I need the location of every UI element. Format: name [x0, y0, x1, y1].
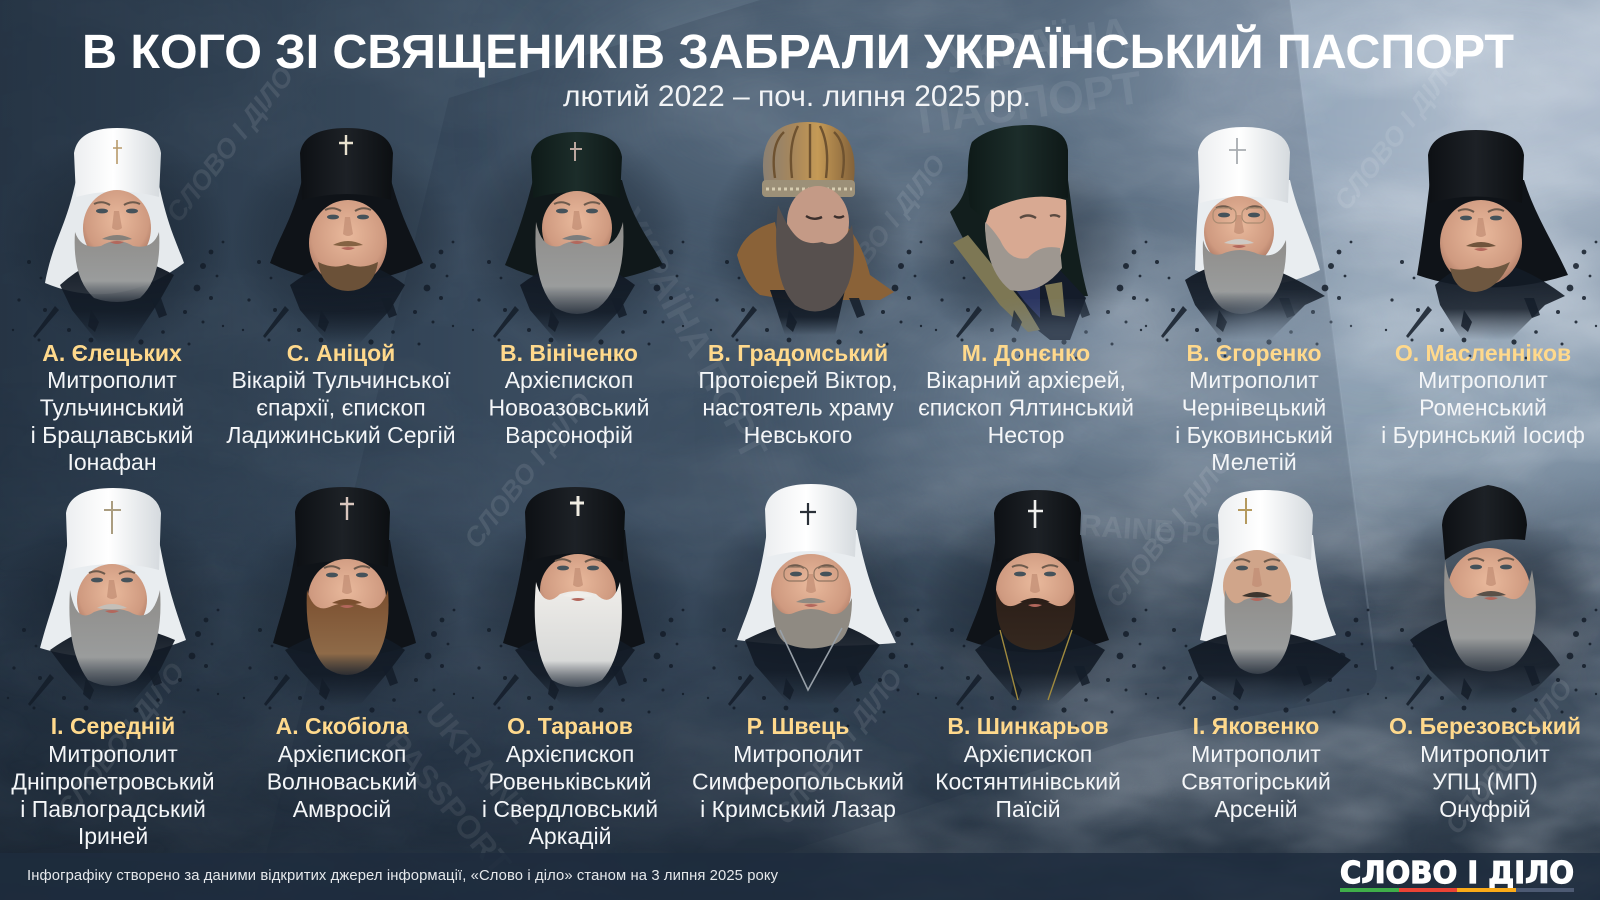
passport silhouette: [255, 0, 1377, 900]
role: Митрополит: [1418, 367, 1548, 393]
role: Митрополит: [733, 741, 863, 767]
portrait: [911, 125, 1147, 359]
watermarks: СЛОВО І ДІЛО: [51, 657, 191, 824]
role: Варсонофій: [505, 422, 633, 448]
role: єпархії, єпископ: [256, 394, 426, 420]
logo: СЛОВО І ДІЛО: [1340, 856, 1574, 891]
role: Архієпископ: [505, 367, 633, 393]
name: М. Донєнко: [962, 340, 1090, 366]
watermarks: СЛОВО І ДІЛО: [1328, 49, 1468, 216]
role: Митрополит: [1420, 741, 1550, 767]
card: Швець: [692, 484, 924, 822]
role: Вікарний архієрей,: [926, 367, 1126, 393]
role: Мелетій: [1211, 449, 1297, 475]
watermarks: СЛОВО І ДІЛО: [458, 387, 598, 554]
role: Новоазовський: [489, 394, 649, 420]
portrait: [1140, 127, 1352, 359]
portrait: [462, 130, 692, 359]
card: Середній: [0, 488, 227, 849]
watermarks: СЛОВО І ДІЛО: [769, 663, 909, 830]
name: А. Скобіола: [276, 713, 409, 739]
card: Донєнко: [911, 125, 1147, 448]
role: Чернівецький: [1182, 394, 1326, 420]
name: І. Яковенко: [1193, 713, 1319, 739]
card: Масленніков: [1381, 130, 1597, 448]
name: О. Масленніков: [1395, 340, 1571, 366]
name: О. Березовський: [1389, 713, 1581, 739]
role: Амвросій: [293, 796, 391, 822]
role: Аркадій: [529, 823, 611, 849]
role: Митрополит: [1189, 367, 1319, 393]
portrait: [0, 488, 227, 727]
role: Святогірський: [1181, 768, 1331, 794]
role: Нестор: [988, 422, 1064, 448]
role: Іриней: [78, 823, 148, 849]
role: Ровеньківський: [489, 768, 651, 794]
role: Роменський: [1419, 394, 1547, 420]
role: і Буковинський: [1175, 422, 1333, 448]
name: В. Єгоренко: [1186, 340, 1322, 366]
watermarks: СЛОВО І ДІЛО: [160, 61, 300, 228]
watermarks: СЛОВО І ДІЛО: [812, 149, 952, 316]
card: Скобіола: [233, 487, 463, 822]
role: Архієпископ: [278, 741, 406, 767]
portrait: [1385, 130, 1597, 359]
role: і Павлоградський: [20, 796, 206, 822]
watermarks: СЛОВО І ДІЛО: [1439, 673, 1579, 840]
cloud overlay: [1220, 310, 1360, 350]
portrait: [708, 122, 922, 359]
card: Аніцой: [226, 128, 462, 448]
role: і Свердловський: [482, 796, 658, 822]
role: і Брацлавський: [31, 422, 193, 448]
portrait: [920, 490, 1150, 727]
passport silhouette: УКРАЇНА: [942, 8, 1134, 83]
portrait: [232, 128, 462, 359]
name: С. Аніцой: [287, 340, 395, 366]
passport silhouette: UKRAINE PORT: [1036, 506, 1266, 555]
role: Костянтинівський: [935, 768, 1121, 794]
portrait: [694, 484, 924, 727]
card: Градомський: [698, 122, 922, 448]
watermarks: СЛОВО І ДІЛО: [1099, 446, 1239, 613]
portrait: [233, 487, 463, 727]
name: Р. Швець: [747, 713, 849, 739]
role: Волноваський: [267, 768, 417, 794]
passport silhouette: PASSPORT: [379, 725, 518, 881]
role: і Буринський Іосиф: [1381, 422, 1585, 448]
role: Невського: [744, 422, 852, 448]
card: Яковенко: [1157, 490, 1369, 822]
card: Березовський: [1379, 485, 1599, 822]
role: Архієпископ: [964, 741, 1092, 767]
card: Єгоренко: [1140, 127, 1360, 475]
role: Симферопольський: [692, 768, 904, 794]
role: Ладижинський Сергій: [226, 422, 456, 448]
role: Онуфрій: [1439, 796, 1531, 822]
card: Таранов: [462, 487, 692, 849]
name: В. Шинкарьов: [947, 713, 1109, 739]
role: Митрополит: [1191, 741, 1321, 767]
passport silhouette: ПАСПОРТ: [915, 61, 1145, 144]
role: Протоієрей Віктор,: [698, 367, 898, 393]
role: Митрополит: [48, 741, 178, 767]
role: Архієпископ: [506, 741, 634, 767]
name: В. Вініченко: [500, 340, 638, 366]
name: І. Середній: [51, 713, 175, 739]
portrait: [1379, 485, 1599, 727]
portrait: [1157, 490, 1369, 727]
cloud overlay: [980, 317, 1140, 353]
role: настоятель храму: [702, 394, 894, 420]
card: Єлецьких: [2, 128, 232, 475]
role: Тульчинський: [40, 394, 184, 420]
role: єпископ Ялтинський: [918, 394, 1134, 420]
role: Іонафан: [67, 449, 157, 475]
role: Арсеній: [1214, 796, 1298, 822]
portrait: [462, 487, 692, 727]
role: Паїсій: [995, 796, 1061, 822]
name: В. Градомський: [708, 340, 888, 366]
subtitle: лютий 2022 – поч. липня 2025 рр.: [563, 80, 1031, 113]
role: Дніпропетровський: [11, 768, 215, 794]
role: Вікарій Тульчинської: [231, 367, 451, 393]
portrait: [2, 128, 232, 359]
name: А. Єлецьких: [42, 340, 182, 366]
card: Вініченко: [462, 130, 692, 448]
card: Шинкарьов: [920, 490, 1150, 822]
role: Митрополит: [47, 367, 177, 393]
role: УПЦ (МП): [1432, 768, 1538, 794]
passport silhouette: UKRAINE: [418, 696, 539, 830]
title: В КОГО ЗІ СВЯЩЕНИКІВ ЗАБРАЛИ УКРАЇНСЬКИЙ ПАСПОРТ: [82, 24, 1514, 79]
name: О. Таранов: [507, 713, 633, 739]
footer band: [0, 853, 1600, 900]
role: і Кримський Лазар: [700, 796, 896, 822]
passport silhouette: УКРАЇНА ПОРТ: [607, 202, 775, 467]
source note: Інфографіку створено за даними відкритих джерел інформації, «Слово і діло» станом на 3 липня 2025 року: [27, 868, 779, 884]
